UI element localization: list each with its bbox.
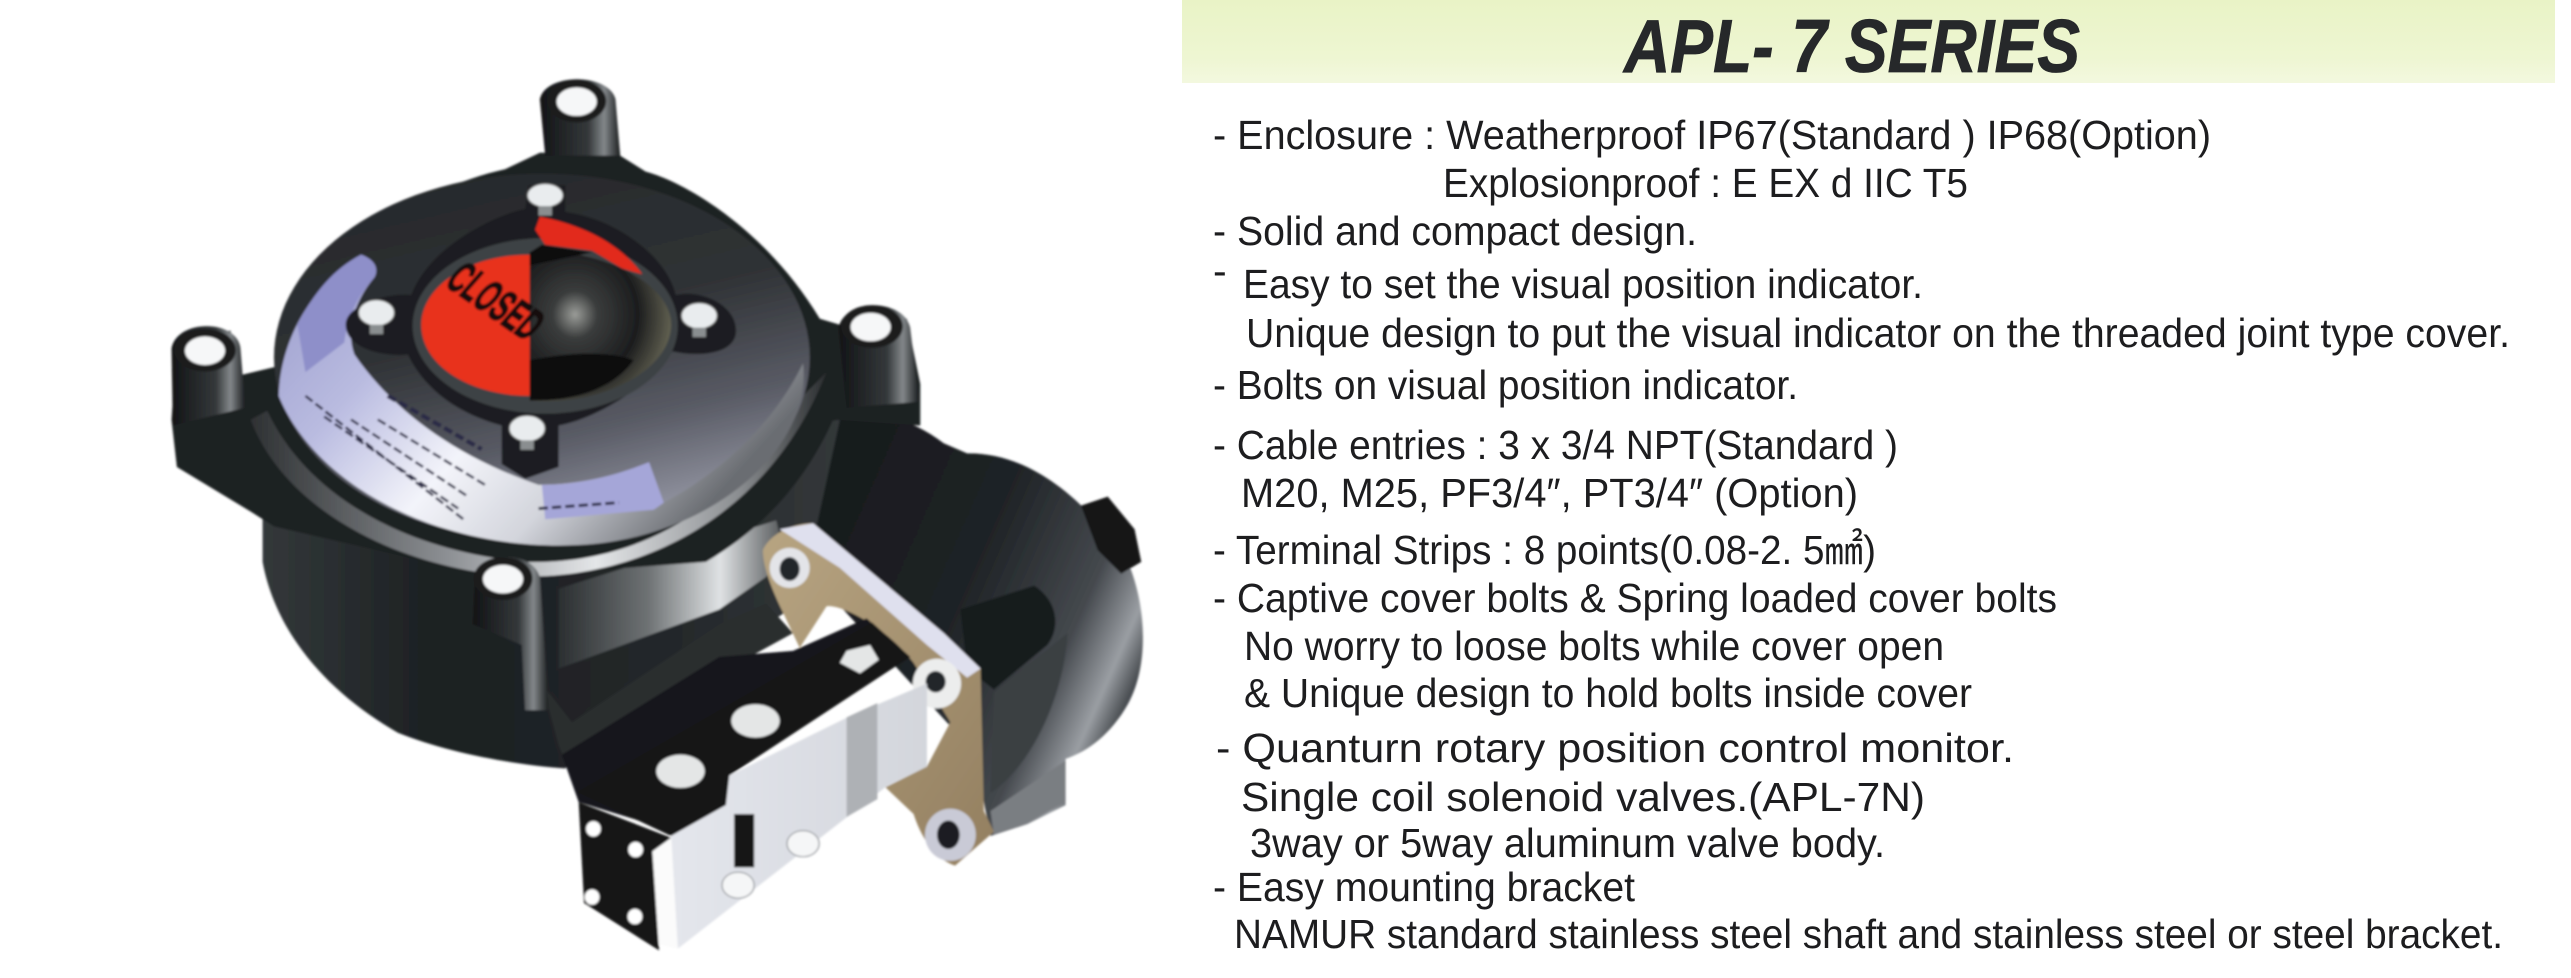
- specification list: 3way or 5way aluminum valve body.: [1250, 820, 1885, 866]
- specification list: M20, M25, PF3/4″, PT3/4″ (Option): [1241, 470, 1858, 516]
- mounting bracket: [763, 523, 994, 866]
- actuator side housing: [766, 408, 1143, 836]
- actuator face highlight: [991, 633, 1068, 793]
- valve ports: [656, 645, 879, 788]
- valve grey divider: [847, 703, 877, 817]
- indicator red top sliver: [535, 217, 642, 274]
- nameplate small print: [305, 396, 619, 520]
- indicator dome outer ring: [413, 238, 678, 414]
- silver lid band with purple nameplate: [279, 255, 804, 546]
- dome cover bolts: [358, 184, 717, 450]
- indicator black dome half: [530, 252, 671, 401]
- lower mounting wedge: [542, 603, 793, 770]
- specification list: [1213, 112, 2510, 957]
- specification list: NAMUR standard stainless steel shaft and stainless steel or steel bracket.: [1234, 911, 2503, 957]
- specification list: Easy to set the visual position indicator.: [1243, 261, 1923, 307]
- solenoid valve block: [562, 618, 927, 950]
- nameplate top purple arc: [297, 255, 376, 372]
- flange with mounting ears: [172, 153, 920, 577]
- cable gland knob: [1081, 497, 1141, 574]
- valve top face: [577, 622, 910, 836]
- valve white end strip: [651, 836, 678, 949]
- specification list: - Cable entries : 3 x 3/4 NPT(Standard ): [1213, 422, 1898, 468]
- flange rim highlight: [251, 372, 826, 577]
- title: APL- 7 SERIES: [1622, 4, 2080, 88]
- valve face screws: [722, 831, 819, 898]
- specification list: No worry to loose bolts while cover open: [1244, 623, 1944, 669]
- indicator text: CLOSED: CLOSED: [437, 252, 555, 350]
- specification list: - Captive cover bolts & Spring loaded cover bolts: [1213, 575, 2057, 621]
- product illustration: APL-7 limit switch box: [172, 79, 1143, 950]
- body skirt under the lid: [559, 520, 783, 669]
- indicator black wedge top: [530, 245, 592, 265]
- actuator recess shadow: [960, 586, 1055, 689]
- valve mounting plate: [562, 618, 910, 829]
- actuator lower shoulder highlight: [991, 761, 1066, 835]
- specification list: - Terminal Strips : 8 points(0.08-2. 5㎟): [1213, 527, 1876, 573]
- specification list: - Enclosure : Weatherproof IP67(Standard ) IP68(Option): [1213, 112, 2211, 158]
- lid dark top: [274, 173, 810, 541]
- specification list: - Bolts on visual position indicator.: [1213, 362, 1798, 408]
- specification list: Unique design to put the visual indicator on the threaded joint type cover.: [1246, 310, 2510, 356]
- specification list: Single coil solenoid valves.(APL-7N): [1241, 774, 1925, 820]
- ear posts: [172, 79, 919, 710]
- indicator seat with bolt lobes: [346, 185, 736, 479]
- title band: [1182, 0, 2555, 88]
- valve slot: [734, 814, 754, 867]
- specification list: & Unique design to hold bolts inside cover: [1244, 670, 1972, 716]
- valve silver face: [671, 684, 927, 949]
- dome lower dark crescent: [530, 354, 634, 401]
- specification list: - Easy mounting bracket: [1213, 864, 1636, 910]
- nameplate lower purple tab: [542, 462, 664, 519]
- valve black end face: [579, 802, 671, 950]
- specification list: - Solid and compact design.: [1213, 208, 1697, 254]
- specification list: Explosionproof : E EX d IIC T5: [1443, 160, 1968, 206]
- enclosure lower body: [263, 420, 840, 768]
- specification list: -: [1213, 248, 1227, 294]
- specification list: - Quanturn rotary position control monitor.: [1216, 725, 2014, 771]
- indicator red half: [421, 255, 530, 396]
